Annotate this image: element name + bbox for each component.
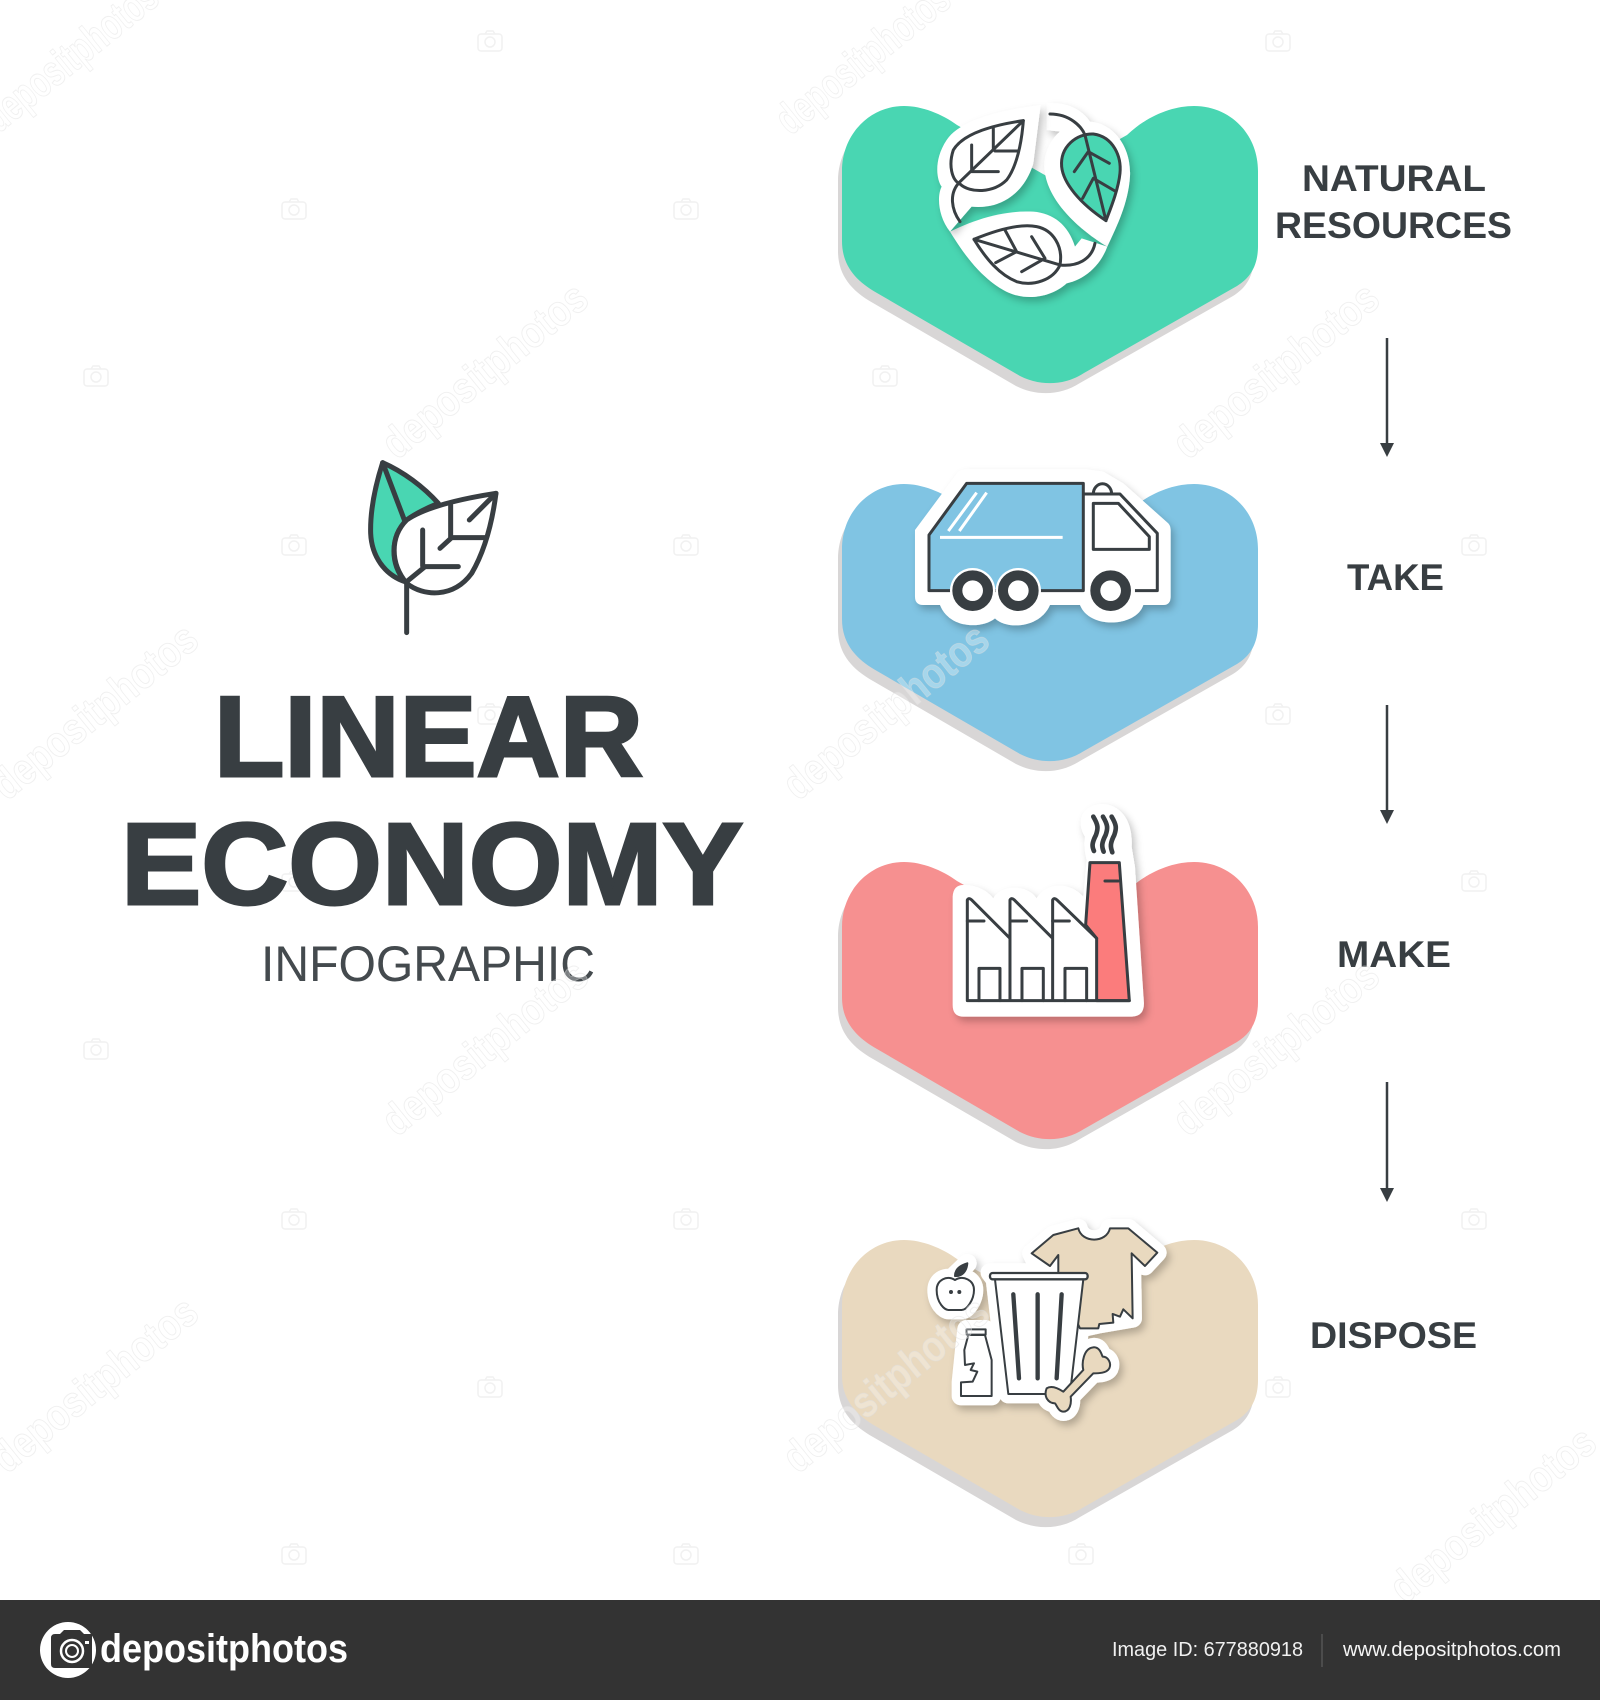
- icon: factory: [953, 804, 1144, 1017]
- watermarks: depositphotos: [372, 950, 597, 1145]
- label: natural resources: NATURAL: [1302, 158, 1486, 199]
- label: take: TAKE: [1347, 557, 1444, 598]
- brand name: depositphotos: [100, 1627, 348, 1671]
- arrow: [1380, 1082, 1394, 1202]
- watermarks: depositphotos: [1163, 273, 1388, 468]
- website: www.depositphotos.com: [1342, 1639, 1561, 1661]
- label: dispose: DISPOSE: [1310, 1315, 1477, 1356]
- icon: truck: [915, 469, 1171, 625]
- title: LINEAR: [214, 674, 643, 801]
- panel: dispose: [838, 1228, 1258, 1527]
- watermarks: depositphotos: [1163, 950, 1388, 1145]
- footer bar: [0, 1600, 1600, 1700]
- panel: natural resources: [838, 103, 1258, 393]
- title: ECONOMY: [121, 799, 743, 929]
- label: natural resources: [1275, 158, 1512, 246]
- watermarks: depositphotos: [372, 273, 597, 468]
- label: natural resources: RESOURCES: [1275, 205, 1512, 246]
- icon: three leaves: [937, 103, 1130, 297]
- watermarks: depositphotos: [773, 614, 998, 809]
- label: make: MAKE: [1337, 934, 1451, 975]
- icon: waste: [937, 1228, 1157, 1412]
- watermark cameras: [84, 31, 1486, 1564]
- panel: take: [838, 469, 1258, 771]
- image id: Image ID: 677880918: [1112, 1639, 1303, 1661]
- icon: leaf logo: [371, 463, 496, 633]
- panel: make: [838, 804, 1258, 1149]
- icon: camera logo: [40, 1622, 96, 1678]
- watermarks: depositphotos: [773, 1287, 998, 1482]
- arrow: [1380, 705, 1394, 824]
- arrow: [1380, 338, 1394, 457]
- subtitle: INFOGRAPHIC: [261, 936, 595, 992]
- title: [121, 674, 743, 929]
